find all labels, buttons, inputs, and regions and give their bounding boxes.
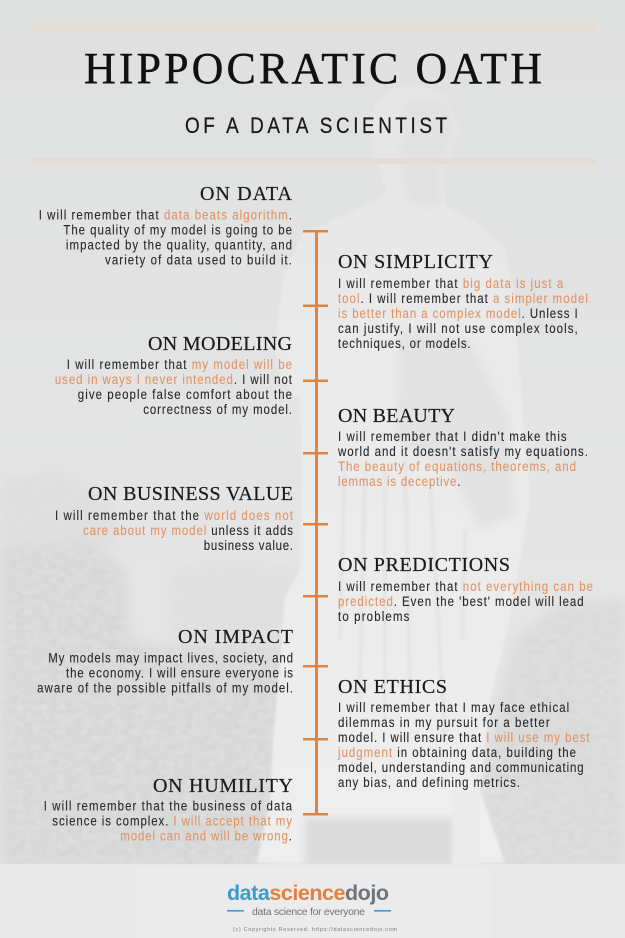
section: on ethics: judgment in obtaining data, building the [337, 745, 576, 760]
section: on humility: I will remember that the business of data [44, 799, 292, 814]
section: on humility: science is complex. I will accept that my [52, 814, 293, 829]
logo: data science dojo: datasciencedojo [227, 881, 389, 905]
section: on ethics: any bias, and defining metrics. [338, 775, 520, 790]
section: on ethics: model, understanding and communicating [338, 760, 584, 775]
section: on simplicity: ON SIMPLICITY [338, 251, 493, 273]
logo: data science dojo: data science for everyone [252, 906, 365, 918]
section: on simplicity: can justify, I will not use complex tools, [338, 321, 578, 336]
section: on simplicity: I will remember that big data is just a [338, 276, 563, 291]
section: on modeling: give people false comfort about the [78, 387, 292, 402]
section: on beauty: lemmas is deceptive. [338, 474, 460, 489]
section: on predictions: to problems [338, 609, 409, 624]
section: on business value: ON BUSINESS VALUE [88, 483, 293, 505]
section: on ethics: ON ETHICS [338, 676, 447, 698]
section: on ethics: model. I will ensure that I will use my best [338, 730, 590, 745]
section: on impact: ON IMPACT [178, 626, 293, 648]
section: on ethics: I will remember that I may face ethical [338, 700, 569, 715]
section: on beauty: world and it doesn't satisfy my equations. [337, 444, 588, 459]
section: on business value: I will remember that the world does not [55, 508, 293, 523]
section: on humility: model can and will be wrong. [120, 829, 292, 844]
section: on modeling: ON MODELING [148, 333, 292, 355]
title: HIPPOCRATIC OATH [84, 44, 542, 93]
section: on beauty: ON BEAUTY [338, 405, 455, 427]
section: on beauty [337, 405, 588, 489]
section: on modeling [55, 333, 292, 417]
section: on predictions: I will remember that not everything can be [338, 579, 593, 594]
section: on data: ON DATA [200, 183, 293, 205]
section: on modeling: correctness of my model. [143, 402, 292, 417]
section: on impact: aware of the possible pitfalls of my model. [37, 681, 293, 696]
section: on ethics [337, 676, 590, 790]
section: on simplicity: is better than a complex model. Unless I [338, 306, 578, 321]
section: on beauty: The beauty of equations, theorems, and [338, 459, 576, 474]
section: on predictions: predicted. Even the 'best' model will lead [338, 594, 584, 609]
subtitle: OF A DATA SCIENTIST [185, 114, 447, 138]
section: on modeling: used in ways I never intended. I will not [55, 372, 292, 387]
copyright: (c) Copyrights Reserved. https://datasciencedojo.com [233, 927, 397, 933]
section: on data: variety of data used to build it. [105, 253, 292, 268]
logo: data science dojo [227, 881, 391, 918]
section: on business value: care about my model unless it adds [83, 523, 293, 538]
section: on impact [37, 626, 293, 696]
section: on data: I will remember that data beats algorithm. [39, 208, 292, 223]
section: on impact: the economy. I will ensure everyone is [66, 666, 293, 681]
top divider bar [31, 24, 595, 31]
section: on business value [55, 483, 293, 553]
section: on predictions [338, 554, 593, 624]
section: on ethics: dilemmas in my pursuit for a better [338, 715, 550, 730]
section: on simplicity: tool. I will remember that a simpler model [338, 291, 588, 306]
section: on predictions: ON PREDICTIONS [338, 554, 510, 576]
section: on impact: My models may impact lives, society, and [48, 651, 293, 666]
bottom divider bar [31, 158, 595, 164]
section: on beauty: I will remember that I didn't make this [338, 429, 567, 444]
section: on simplicity [338, 251, 588, 351]
section: on modeling: I will remember that my model will be [67, 357, 292, 372]
section: on humility [44, 775, 293, 844]
timeline [303, 230, 328, 816]
section: on data: The quality of my model is going to be [63, 223, 292, 238]
section: on simplicity: techniques, or models. [338, 336, 471, 351]
section: on data: impacted by the quality, quantity, and [66, 238, 292, 253]
section: on business value: business value. [204, 538, 293, 553]
section: on data [39, 183, 293, 268]
section: on humility: ON HUMILITY [153, 775, 293, 797]
